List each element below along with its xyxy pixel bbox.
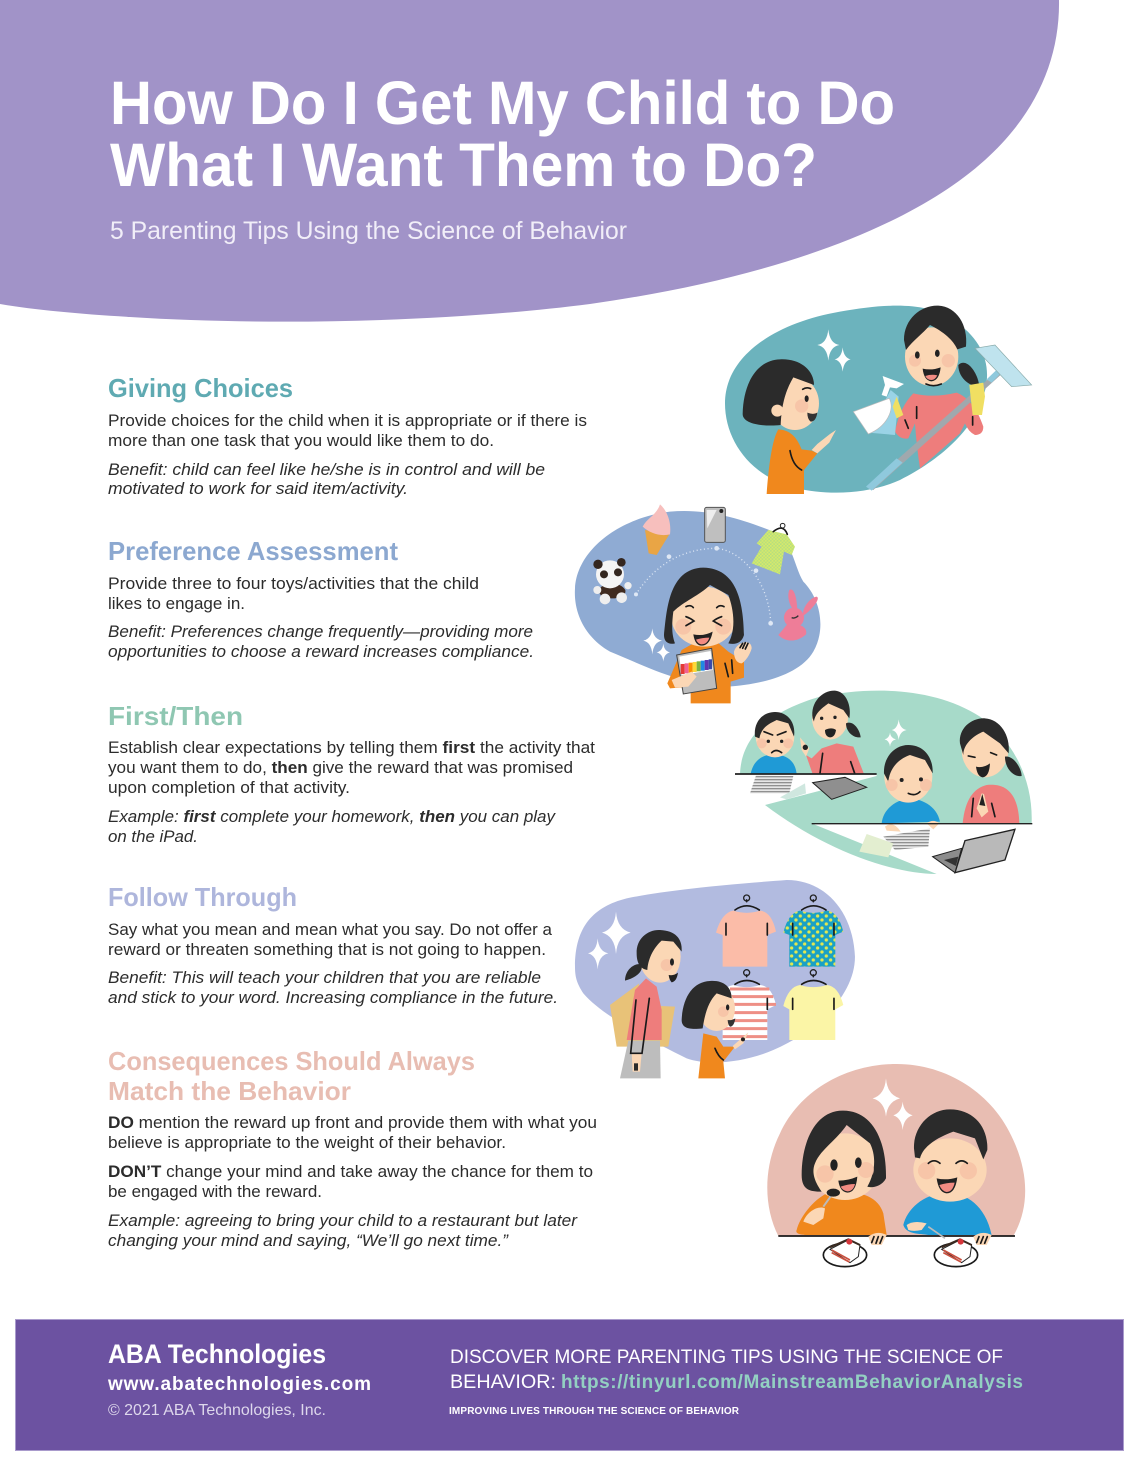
panel: giving choices text: motivated to work for said item/activity. bbox=[108, 479, 408, 498]
footer logo and site bbox=[107, 1339, 371, 1419]
panel: preference assessment text: Provide three to four toys/activities that the child bbox=[108, 574, 479, 593]
illustration: child choosing a preferred item bbox=[575, 504, 820, 703]
title bbox=[110, 69, 895, 199]
illustration: child choosing chores with parent bbox=[725, 306, 1032, 494]
figure: smiling child with pencils bbox=[643, 568, 752, 703]
decorative table line bbox=[778, 1233, 1015, 1238]
panel: follow through text: and stick to your word. Increasing compliance in the future. bbox=[108, 988, 558, 1007]
panel: consequences text: changing your mind and saying, “We’ll go next time.” bbox=[108, 1231, 509, 1250]
panel: consequences text: be engaged with the reward. bbox=[108, 1182, 322, 1201]
footer logo and site: www.abatechnologies.com bbox=[107, 1374, 371, 1395]
footer call to action bbox=[449, 1347, 1023, 1417]
panel: consequences text: believe is appropriate to the weight of their behavior. bbox=[108, 1133, 506, 1152]
panel: giving choices text: Benefit: child can feel like he/she is in control and will be bbox=[108, 460, 545, 479]
icon: laptop bbox=[933, 829, 1015, 873]
decorative desks lines bbox=[735, 774, 1032, 824]
panel: first/then text: you want them to do, then give the reward that was promised bbox=[108, 758, 573, 777]
panel: follow through text bbox=[108, 882, 558, 1007]
panel: follow through text: Say what you mean and mean what you say. Do not offer a bbox=[108, 920, 553, 939]
figure: parent with cleaning tools bbox=[853, 306, 1032, 491]
panel: consequences text: DON’T change your mind and take away the chance for them to bbox=[108, 1162, 593, 1181]
icon: green shirt bbox=[752, 523, 795, 574]
icon: pink bunny bbox=[778, 590, 818, 641]
figure: mother pointing bbox=[800, 691, 864, 774]
icon: striped shirt bbox=[716, 970, 776, 1040]
panel: preference assessment text: Preference Assessment bbox=[108, 536, 398, 566]
icon: coral shirt bbox=[716, 895, 776, 967]
panel: giving choices text: Giving Choices bbox=[108, 373, 293, 403]
icon: panda toy bbox=[593, 558, 632, 604]
panel: follow through text: Benefit: This will teach your children that you are reliable bbox=[108, 968, 541, 987]
illustration: follow through shopping scene bbox=[575, 880, 855, 1078]
figure: boy eating bbox=[903, 1109, 992, 1235]
figure: happy mother bbox=[960, 718, 1022, 823]
subtitle: 5 Parenting Tips Using the Science of Behavior bbox=[110, 217, 627, 245]
figure: child pointing bbox=[682, 981, 748, 1078]
icon: phone bbox=[705, 507, 725, 542]
panel: first/then text: upon completion of that activity. bbox=[108, 778, 350, 797]
footer call to action: https://tinyurl.com/MainstreamBehaviorAnalysis bbox=[561, 1372, 1023, 1393]
title: How Do I Get My Child to Do bbox=[110, 69, 895, 137]
panel: first/then text: on the iPad. bbox=[108, 827, 198, 846]
icon: hands on table bbox=[868, 1233, 992, 1245]
panel: giving choices text bbox=[108, 373, 587, 498]
illustration: children eating cake bbox=[767, 1064, 1025, 1267]
panel: first/then text: Example: first complete your homework, then you can play bbox=[108, 807, 556, 826]
panel: preference assessment text: likes to engage in. bbox=[108, 594, 245, 613]
panel: giving choices text: more than one task that you would like them to do. bbox=[108, 431, 494, 450]
icon: right cake plate bbox=[928, 1227, 978, 1267]
header banner bbox=[0, 0, 1059, 322]
panel: consequences text: Example: agreeing to bring your child to a restaurant but later bbox=[108, 1211, 578, 1230]
panel: consequences text bbox=[108, 1046, 597, 1250]
figure: child pointing bbox=[743, 359, 836, 494]
panel: preference assessment text: opportunities to choose a reward increases compliance. bbox=[108, 642, 534, 661]
footer call to action: BEHAVIOR: bbox=[450, 1372, 556, 1393]
figure: girl eating bbox=[796, 1111, 887, 1235]
icon: ice cream bbox=[643, 504, 670, 555]
panel: consequences text: DO mention the reward up front and provide them with what you bbox=[108, 1113, 597, 1132]
panel: preference assessment text bbox=[108, 536, 534, 661]
panel: first/then text bbox=[108, 701, 595, 846]
panel: giving choices text: Provide choices for the child when it is appropriate or if there is bbox=[108, 411, 587, 430]
icon: yellow shirt bbox=[783, 970, 843, 1040]
figure: mother with bag bbox=[610, 930, 682, 1078]
panel: follow through text: Follow Through bbox=[108, 882, 297, 912]
footer logo and site: ABA Technologies bbox=[108, 1339, 326, 1369]
panel: first/then text: Establish clear expectations by telling them first the activity that bbox=[108, 738, 595, 757]
figure: upset child at desk bbox=[750, 712, 867, 799]
panel: consequences text: Match the Behavior bbox=[108, 1076, 351, 1106]
icon: dotted shirt bbox=[783, 895, 843, 967]
figure: happy child at desk bbox=[859, 745, 940, 857]
panel: first/then text: First/Then bbox=[108, 701, 243, 731]
title: What I Want Them to Do? bbox=[110, 131, 817, 199]
footer logo and site: © 2021 ABA Technologies, Inc. bbox=[108, 1402, 326, 1419]
illustration: first then homework scene bbox=[735, 691, 1032, 874]
icon: left cake plate bbox=[823, 1239, 867, 1267]
panel: follow through text: reward or threaten something that is not going to happen. bbox=[108, 940, 546, 959]
footer call to action: DISCOVER MORE PARENTING TIPS USING THE SCIENCE OF bbox=[450, 1347, 1003, 1368]
footer call to action: IMPROVING LIVES THROUGH THE SCIENCE OF BEHAVIOR bbox=[449, 1406, 740, 1417]
panel: consequences text: Consequences Should Always bbox=[108, 1046, 475, 1076]
icons: sparkles bbox=[885, 719, 907, 747]
panel: preference assessment text: Benefit: Preferences change frequently—providing more bbox=[108, 622, 533, 641]
footer band bbox=[16, 1320, 1124, 1450]
